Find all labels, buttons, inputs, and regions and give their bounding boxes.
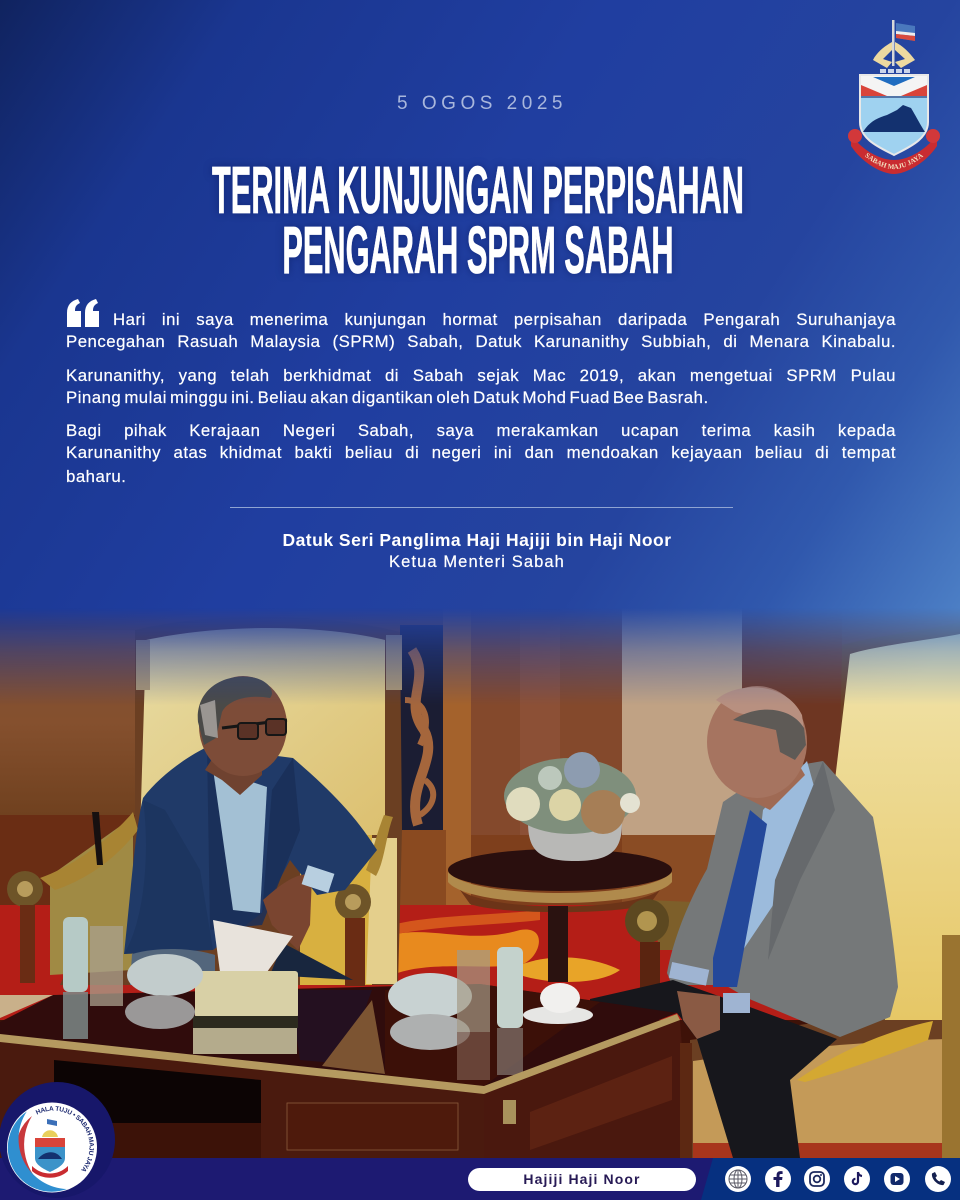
body paragraph 1: Hari ini saya menerima kunjungan hormat perpisahan daripada Pengarah Suruhanjaya xyxy=(113,310,896,329)
date: 5 OGOS 2025 xyxy=(397,93,567,114)
signature: name and role: Ketua Menteri Sabah xyxy=(389,553,565,571)
icon: facebook xyxy=(765,1166,791,1192)
tissue box xyxy=(193,920,298,1054)
vase with flowers xyxy=(504,752,640,861)
body paragraph 2: Pinang mulai minggu ini. Beliau akan digantikan oleh Datuk Mohd Fuad Bee Basrah. xyxy=(66,388,709,407)
right chair xyxy=(625,622,960,1160)
icon: instagram xyxy=(804,1166,830,1192)
left chair xyxy=(7,617,402,986)
scroll motto: SABAH MAJU JAYA xyxy=(865,153,924,170)
beads xyxy=(880,69,910,73)
flag xyxy=(892,20,915,66)
right man xyxy=(590,686,898,1158)
body paragraph 1: Pencegahan Rasuah Malaysia (SPRM) Sabah, Datuk Karunanithy Subbiah, di Menara Kinabalu. xyxy=(66,332,896,351)
divider xyxy=(230,507,733,508)
title xyxy=(210,153,746,288)
signature: name and role: Datuk Seri Panglima Haji Hajiji bin Haji Noor xyxy=(282,530,672,550)
handle pill xyxy=(468,1168,696,1191)
icon: phone xyxy=(925,1166,951,1192)
body paragraph 2 xyxy=(66,366,896,407)
body paragraph 3 xyxy=(66,421,896,486)
vase table xyxy=(448,849,672,982)
body paragraph 1 xyxy=(66,310,896,351)
title: TERIMA KUNJUNGAN PERPISAHAN xyxy=(212,153,744,228)
round logo badge xyxy=(0,1082,115,1198)
left man xyxy=(124,676,377,985)
shield xyxy=(860,75,928,155)
body paragraph 3: baharu. xyxy=(66,467,126,486)
handle pill: Hajiji Haji Noor xyxy=(523,1171,641,1187)
badge crest xyxy=(32,1119,68,1178)
body paragraph 3: Karunanithy atas khidmat bakti beliau di negeri ini dan mendoakan kejayaan beliau di tempat xyxy=(66,443,896,462)
badge arc text: HALA TUJU • SABAH MAJU JAYA xyxy=(36,1106,94,1172)
icon: quotation mark xyxy=(67,299,99,327)
wall xyxy=(0,614,443,632)
icon: website xyxy=(725,1166,751,1192)
title: PENGARAH SPRM SABAH xyxy=(282,213,674,288)
coffee table xyxy=(0,984,692,1158)
scroll motto xyxy=(848,129,940,174)
icon: Sabah coat of arms xyxy=(848,20,940,174)
carved panel xyxy=(400,625,443,830)
icon: tiktok xyxy=(844,1166,870,1192)
icon: youtube xyxy=(884,1166,910,1192)
body paragraph 3: Bagi pihak Kerajaan Negeri Sabah, saya merakamkan ucapan terima kasih kepada xyxy=(66,421,896,440)
carpet xyxy=(0,905,809,1094)
body paragraph 2: Karunanithy, yang telah berkhidmat di Sabah sejak Mac 2019, akan mengetuai SPRM Pulau xyxy=(66,366,896,385)
signature: name and role xyxy=(282,530,672,571)
arms holding flag xyxy=(873,42,915,68)
table items xyxy=(63,917,593,1080)
table gold rim xyxy=(0,1014,680,1094)
footer blue panel xyxy=(701,1158,960,1200)
footer bar xyxy=(0,1158,960,1200)
